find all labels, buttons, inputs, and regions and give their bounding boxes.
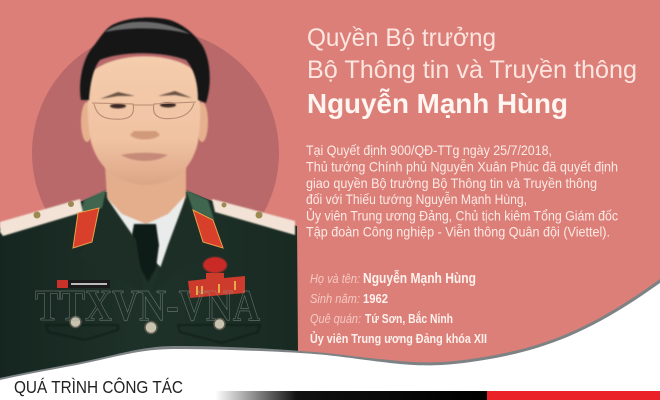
title line 1: Quyền Bộ trưởng [307, 24, 496, 52]
hometown: Quê quán: [310, 311, 361, 326]
left epaulette [0, 199, 83, 236]
right epaulette [212, 199, 295, 235]
white wave section [0, 283, 660, 400]
hair highlight [105, 22, 190, 34]
description paragraph: Tập đoàn Công nghiệp - Viễn thông Quân đội (Viettel). [306, 224, 610, 240]
section heading: QUÁ TRÌNH CÔNG TÁC [14, 376, 183, 397]
uniform buttons [70, 316, 225, 334]
right collar tab [193, 210, 223, 248]
collar green left [80, 190, 106, 216]
eyes [110, 102, 176, 108]
portrait photo [0, 18, 298, 378]
description paragraph: Tại Quyết định 900/QĐ-TTg ngày 25/7/2018, [306, 142, 552, 158]
left collar tab [73, 208, 99, 248]
chest pockets [46, 325, 260, 343]
party role: Ủy viên Trung ương Đảng khóa XII [310, 331, 487, 346]
white shirt collar [107, 196, 185, 268]
hometown [310, 311, 453, 326]
necktie [131, 224, 159, 282]
ribbon stripes [196, 281, 236, 295]
hair [80, 18, 210, 103]
eyebrows [100, 91, 192, 99]
neck [105, 165, 186, 240]
uniform jacket [0, 192, 298, 378]
description paragraph: Ủy viên Trung ương Đảng, Chủ tịch kiêm Tổng Giám đốc [306, 206, 618, 224]
birth year: 1962 [363, 291, 388, 306]
full name: Họ và tên: [310, 271, 360, 286]
jacket lapel right [152, 197, 207, 292]
epaulette stars [34, 201, 262, 218]
full name: Nguyễn Mạnh Hùng [363, 270, 476, 287]
medal ribbons [188, 273, 245, 298]
face [88, 56, 200, 185]
jacket lapel left [80, 197, 144, 291]
description paragraph: đối với Thiếu tướng Nguyễn Mạnh Hùng, [306, 191, 527, 207]
bottom bar red [487, 391, 660, 400]
description paragraph [306, 142, 618, 240]
wave grey edge [0, 279, 660, 400]
description paragraph: giao quyền Bộ trưởng Bộ Thông tin và Truyền thông [306, 175, 597, 191]
backdrop circle [32, 30, 279, 276]
description paragraph: Thủ tướng Chính phủ Nguyễn Xuân Phúc đã quyết định [306, 158, 618, 174]
title [307, 24, 637, 119]
name tag [57, 280, 110, 288]
title line 2: Bộ Thông tin và Truyền thông [307, 56, 637, 84]
nose shadow [130, 131, 160, 140]
name heading: Nguyễn Mạnh Hùng [307, 88, 568, 119]
red flower badge [203, 257, 227, 273]
collar green right [186, 190, 214, 220]
birth year: Sinh năm: [310, 291, 360, 306]
glasses [92, 102, 196, 119]
full name [310, 270, 476, 287]
ears [81, 102, 208, 142]
mouth [121, 153, 168, 161]
watermark TTXVN-VNA: TTXVN-VNA [35, 281, 260, 330]
bottom bar gradient [215, 391, 487, 400]
hometown: Tứ Sơn, Bắc Ninh [365, 311, 453, 326]
personal details [310, 270, 487, 346]
